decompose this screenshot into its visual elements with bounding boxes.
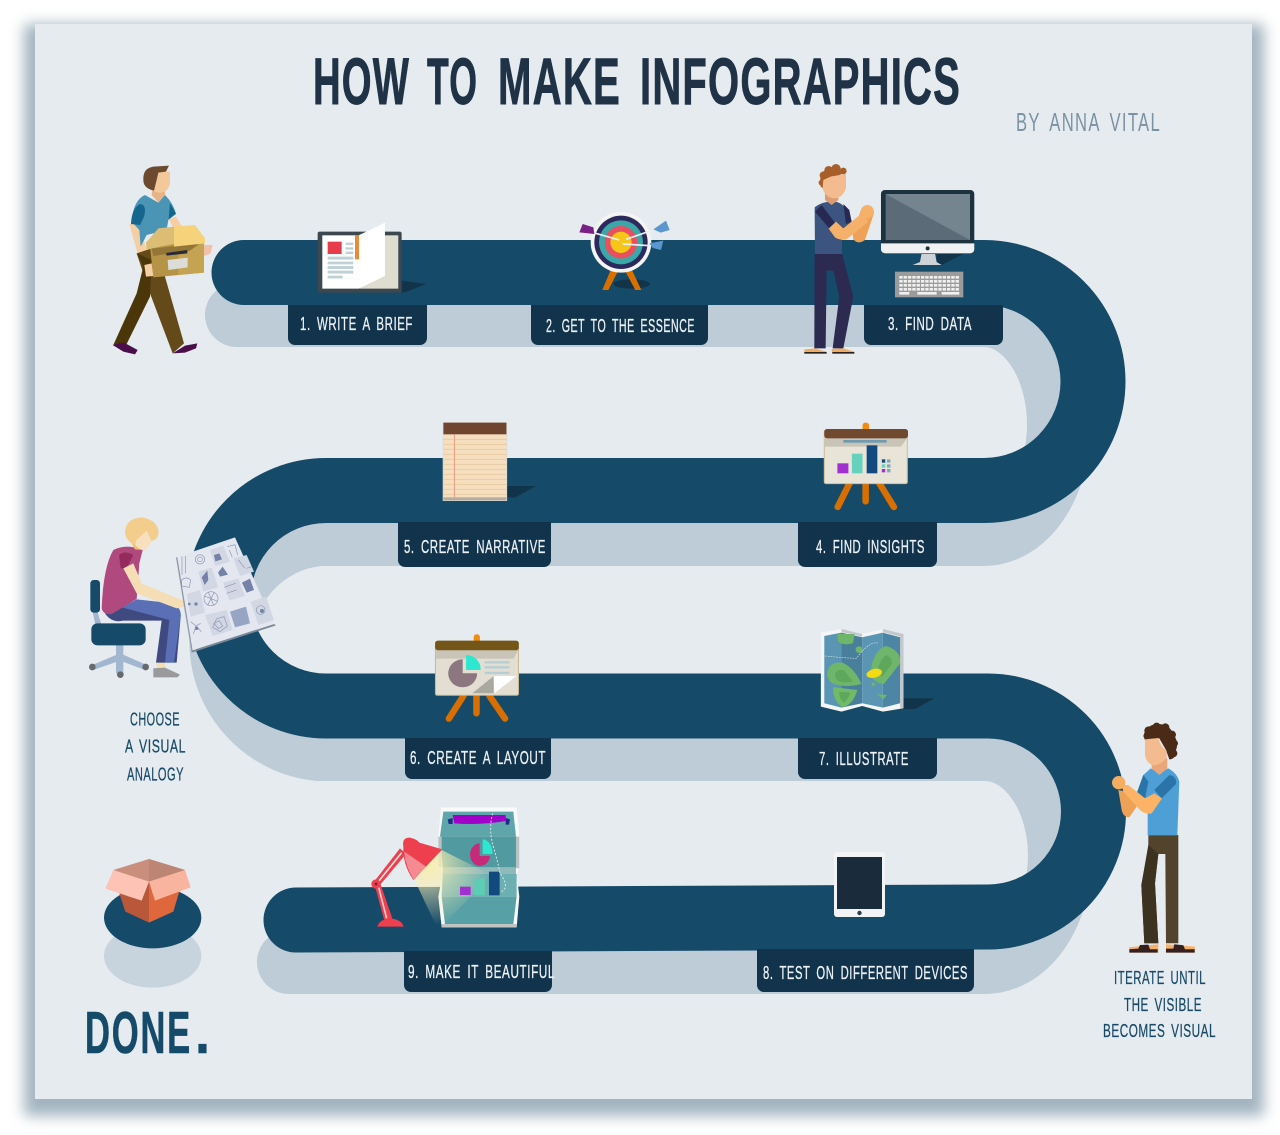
title [313,44,961,118]
step label 3 [864,305,1003,345]
caption: iterate until: BECOMES VISUAL [1103,1021,1216,1041]
caption: iterate until: ITERATE UNTIL [1114,968,1206,988]
done text [85,1000,210,1066]
icon: done box on pedestal [104,859,201,988]
title: HOW [313,44,410,118]
caption: choose a visual analogy: A VISUAL [125,736,186,756]
icon: open book brief [318,223,426,293]
step label 3: 3. FIND DATA [888,314,972,334]
step label 6: 6. CREATE A LAYOUT [410,748,546,768]
step label 8 [757,949,974,992]
step label 2: 2. GET TO THE ESSENCE [546,316,695,336]
icon: notepad [443,422,536,501]
caption: iterate until [1103,968,1216,1041]
title: INFOGRAPHICS [640,44,961,118]
caption: iterate until: THE VISIBLE [1124,995,1202,1015]
road shadow [221,315,1060,962]
caption: choose a visual analogy: CHOOSE [130,710,180,730]
icon: tablet [834,852,885,917]
title: TO [427,44,478,118]
step label 9: 9. MAKE IT BEAUTIFUL [408,962,555,982]
chart sheet [176,537,276,653]
step label 9 [404,951,555,992]
icon: target with arrows [579,212,670,290]
done text: DONE [85,1000,192,1066]
icon: lamp and folded poster [371,807,519,927]
byline: BY ANNA VITAL [1016,107,1161,137]
step label 5 [398,522,551,567]
step label 4: 4. FIND INSIGHTS [816,537,925,557]
step label 5: 5. CREATE NARRATIVE [404,537,546,557]
icon: person with chart sheet [89,517,276,678]
step label 1 [288,305,427,345]
step label 6 [405,738,551,779]
winding road [218,272,1094,920]
step label 7: 7. ILLUSTRATE [819,749,909,769]
step label 2 [531,305,708,345]
step label 4 [798,522,937,567]
icon: person pushing road [1112,723,1195,953]
step label 1: 1. WRITE A BRIEF [300,314,413,334]
step label 8: 8. TEST ON DIFFERENT DEVICES [763,963,968,983]
icon: person carrying box [113,166,213,354]
icon: easel with layout [435,634,519,719]
step label 7 [798,738,937,779]
icon: desktop monitor and keyboard [881,190,974,297]
icon: folded map [821,629,935,712]
caption: choose a visual analogy [125,710,186,784]
caption: choose a visual analogy: ANALOGY [127,764,184,784]
title: MAKE [498,44,621,118]
icon: person at computer [804,164,874,354]
icon: easel with bar chart [824,423,908,507]
done text: . [195,1000,210,1066]
